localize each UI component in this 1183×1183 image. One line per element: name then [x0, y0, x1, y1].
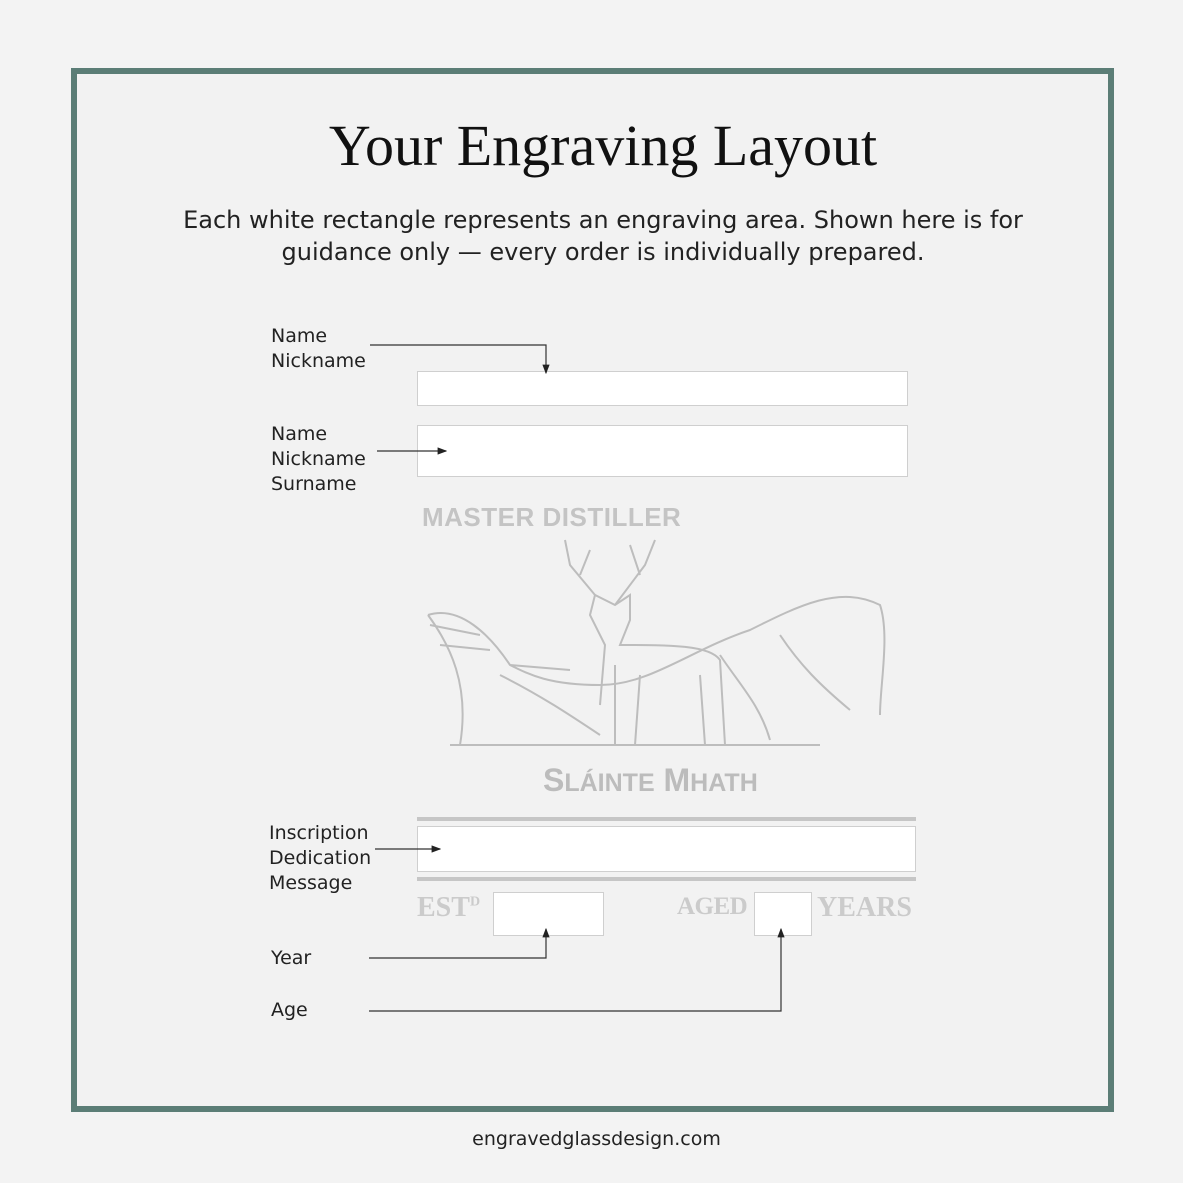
label: name nickname 1: Nickname: [271, 350, 366, 372]
label: inscription: Message: [269, 872, 352, 894]
master distiller text: MASTER DISTILLER: [422, 502, 681, 532]
subtitle: Each white rectangle represents an engraving area. Shown here is for guidance only — every order is individually prepared.: [183, 206, 1023, 266]
label: inscription: [269, 822, 371, 894]
slainte mhath text: SLÁINTE MHATH: [543, 762, 758, 798]
box 2: [417, 425, 908, 477]
title: Your Engraving Layout: [329, 113, 877, 178]
label: name nickname surname: Nickname: [271, 448, 366, 470]
illustration: stag and hills: [427, 540, 886, 746]
label: year: Year: [271, 947, 311, 969]
label: age: Age: [271, 999, 308, 1021]
year box: [493, 892, 604, 936]
footer url: engravedglassdesign.com: [472, 1128, 721, 1150]
box 1: [417, 371, 908, 406]
est text: ESTD: [417, 892, 480, 923]
label: name nickname surname: Surname: [271, 473, 356, 495]
label: inscription: Dedication: [269, 847, 371, 869]
label: inscription: Inscription: [269, 822, 369, 844]
label: name nickname 1: [271, 325, 366, 372]
frame: [71, 68, 1114, 1112]
label: name nickname surname: [271, 423, 366, 495]
label: name nickname 1: Name: [271, 325, 327, 347]
age box: [754, 892, 812, 936]
aged text: AGED: [677, 893, 747, 920]
label: name nickname surname: Name: [271, 423, 327, 445]
years text: YEARS: [817, 892, 912, 923]
box 3: [417, 826, 916, 872]
decorative bars: [417, 817, 916, 821]
